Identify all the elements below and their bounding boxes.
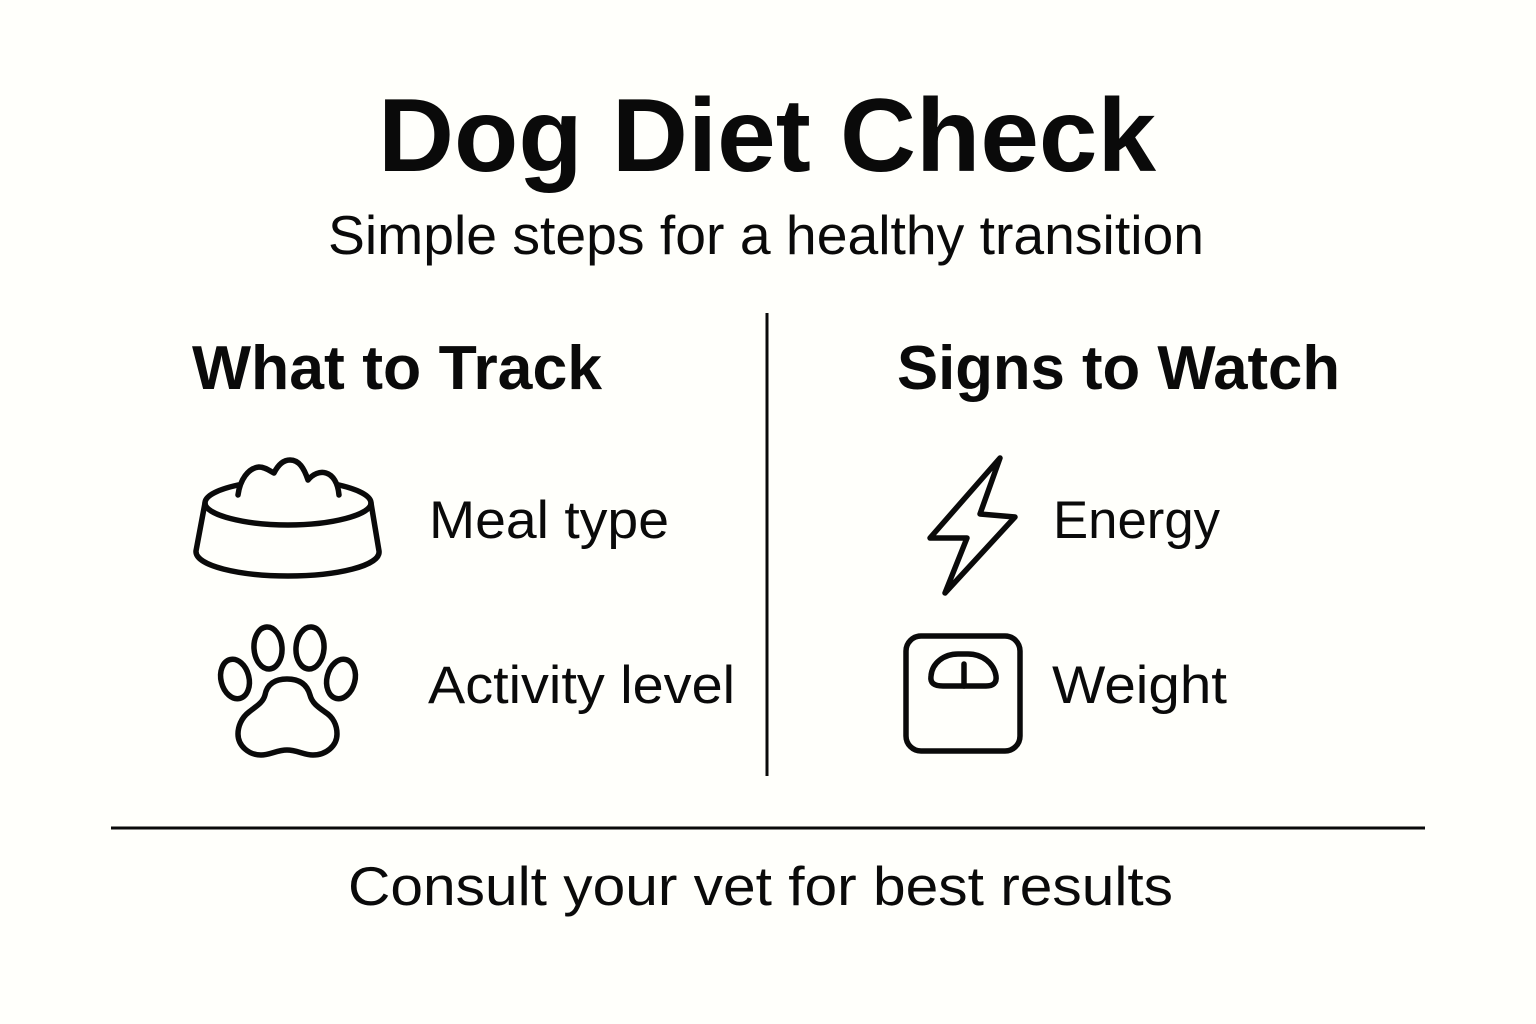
title: Dog Diet Check — [378, 78, 1156, 194]
label: energy: Energy — [1053, 491, 1220, 550]
panel: signs to watch — [897, 334, 1340, 751]
panel: what to track — [192, 334, 735, 755]
label: activity level: Activity level — [428, 656, 735, 715]
subtitle: Simple steps for a healthy transition — [328, 204, 1204, 266]
icon: food bowl — [196, 460, 379, 576]
label: weight: Weight — [1052, 656, 1227, 715]
footer note: Consult your vet for best results — [348, 855, 1173, 917]
horizontal divider — [111, 826, 1425, 830]
heading: what to track: What to Track — [192, 334, 603, 403]
icon: lightning bolt — [930, 458, 1015, 593]
label: meal type: Meal type — [429, 491, 669, 550]
icon: paw print — [217, 626, 359, 755]
heading: signs to watch: Signs to Watch — [897, 334, 1340, 403]
icon: weighing scale — [906, 636, 1020, 751]
vertical divider — [766, 313, 768, 776]
